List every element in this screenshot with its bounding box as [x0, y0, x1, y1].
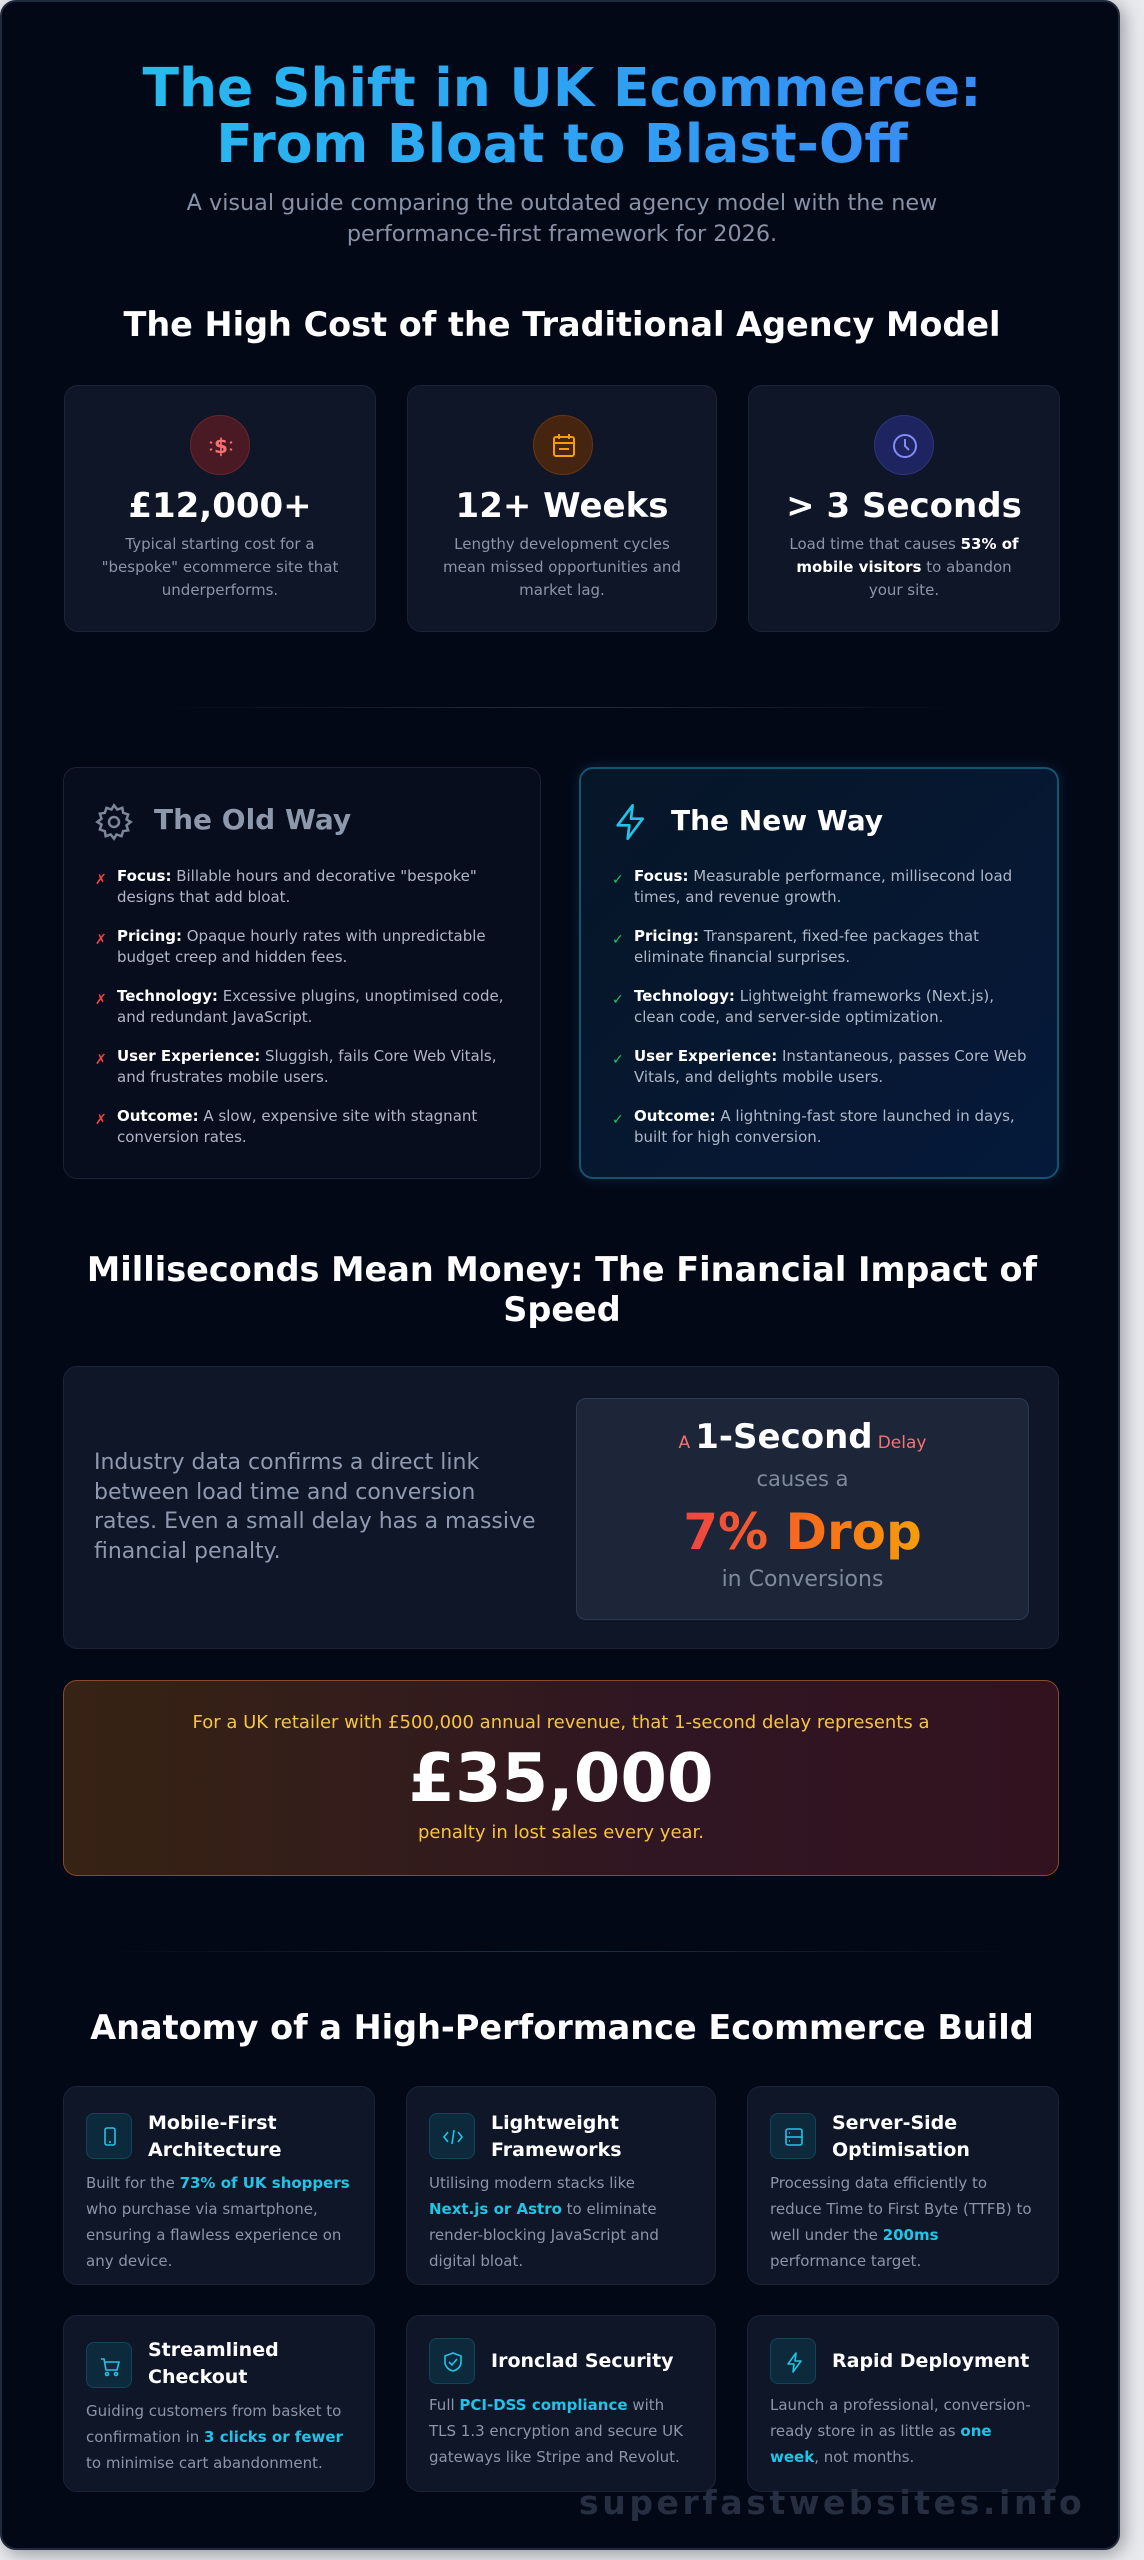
- subtitle: performance-first framework for 2026.: [347, 221, 777, 247]
- panel: old way: ✗: [95, 872, 107, 888]
- feature: mobile-first: Mobile-First: [148, 2112, 277, 2134]
- feature: frameworks: Frameworks: [491, 2139, 622, 2161]
- panel: penalty: [63, 1680, 1059, 1876]
- feature: mobile-first: Architecture: [148, 2139, 281, 2161]
- icon: bolt: [770, 2338, 816, 2384]
- feature: frameworks: Lightweight: [491, 2112, 619, 2134]
- stat card: cost: Typical starting cost for a "bespoke" ecommerce site that underperforms.: [102, 535, 338, 599]
- list: old way: Technology: Excessive plugins, unoptimised code, and redundant JavaScript.: [117, 987, 504, 1026]
- list: old way: Outcome: A slow, expensive site with stagnant conversion rates.: [117, 1107, 477, 1146]
- list: new way: Focus: Measurable performance, millisecond load times, and revenue growth.: [634, 867, 1012, 906]
- feature: checkout: Streamlined: [148, 2339, 279, 2361]
- icon: code: [429, 2113, 475, 2159]
- feature: deployment: Rapid Deployment: [832, 2350, 1029, 2372]
- callout: 7% drop: causes a: [756, 1467, 849, 1491]
- panel: old way: ✗: [95, 992, 107, 1008]
- icon: phone: [86, 2113, 132, 2159]
- icon: calendar: [533, 415, 593, 475]
- list: old way: Focus: Billable hours and decorative "bespoke" designs that add bloat.: [117, 867, 477, 906]
- heading: milliseconds: Milliseconds Mean Money: The Financial Impact of: [87, 1250, 1037, 1289]
- panel: old way: ✗: [95, 1112, 107, 1128]
- heading: high cost: The High Cost of the Traditional Agency Model: [123, 305, 1001, 344]
- panel: penalty: £35,000: [408, 1739, 714, 1817]
- panel: speed impact: [63, 1366, 1059, 1649]
- feature: security: Ironclad Security: [491, 2350, 674, 2372]
- list: new way: [612, 867, 1026, 1146]
- panel: penalty: For a UK retailer with £500,000 annual revenue, that 1-second delay represents a: [192, 1712, 930, 1733]
- panel: new way: ✓: [612, 1052, 624, 1068]
- stat card: weeks: [407, 385, 717, 632]
- stat card: cost: £12,000+: [128, 486, 312, 526]
- text: industry data: financial penalty.: [94, 1538, 281, 1564]
- list: new way: User Experience: Instantaneous, passes Core Web Vitals, and delights mobile users.: [634, 1047, 1026, 1086]
- feature: checkout: Checkout: [148, 2366, 247, 2388]
- icon: dollar: [190, 415, 250, 475]
- list: old way: Pricing: Opaque hourly rates with unpredictable budget creep and hidden fees.: [117, 927, 486, 966]
- feature: frameworks: Utilising modern stacks like Next.js or Astro to eliminate render-blocking JavaScript and digital bloat.: [429, 2174, 659, 2270]
- icon: cart: [86, 2342, 132, 2388]
- heading: anatomy: Anatomy of a High-Performance Ecommerce Build: [90, 2008, 1034, 2047]
- feature: mobile-first: Built for the 73% of UK shoppers who purchase via smartphone, ensuring a flawless experience on any device.: [86, 2174, 350, 2270]
- callout: 7% drop: A 1-Second Delay: [679, 1417, 926, 1457]
- heading: old way: The Old Way: [154, 803, 351, 836]
- feature: checkout: Guiding customers from basket to confirmation in 3 clicks or fewer to minimise cart abandonment.: [86, 2402, 343, 2472]
- subtitle: A visual guide comparing the outdated agency model with the new: [187, 190, 937, 216]
- icon: gear: [95, 803, 133, 841]
- icon: clock: [874, 415, 934, 475]
- text: industry data: rates. Even a small delay has a massive: [94, 1509, 536, 1534]
- list: old way: [95, 867, 504, 1146]
- heading: milliseconds: [87, 1250, 1038, 1329]
- feature: frameworks: [406, 2086, 716, 2285]
- panel: old way: [63, 767, 541, 1179]
- callout: 7% drop: [576, 1398, 1029, 1620]
- stat card: seconds: > 3 Seconds: [786, 486, 1022, 526]
- icon: server: [770, 2113, 816, 2159]
- callout: 7% drop: in Conversions: [722, 1567, 883, 1592]
- title: The Shift in UK Ecommerce:: [142, 56, 982, 119]
- stat card: weeks: Lengthy development cycles mean missed opportunities and market lag.: [443, 535, 681, 599]
- stat card: cost: [64, 385, 376, 632]
- feature: deployment: [747, 2315, 1059, 2492]
- heading: new way: The New Way: [671, 804, 883, 837]
- list: old way: User Experience: Sluggish, fails Core Web Vitals, and frustrates mobile users.: [117, 1047, 497, 1086]
- feature: server-side: [747, 2086, 1059, 2285]
- text: industry data: Industry data confirms a direct link: [94, 1450, 479, 1475]
- panel: new way: ✓: [612, 872, 624, 888]
- watermark: superfastwebsites.info: [579, 2483, 1085, 2522]
- feature: security: Full PCI-DSS compliance with TLS 1.3 encryption and secure UK gateways like Stripe and Revolut.: [429, 2396, 683, 2466]
- stat card: weeks: 12+ Weeks: [456, 486, 668, 526]
- feature: deployment: Launch a professional, conversion-ready store in as little as one week, not months.: [770, 2396, 1031, 2466]
- feature: checkout: [63, 2315, 375, 2492]
- callout: 7% drop: 7% Drop: [683, 1503, 922, 1561]
- feature: server-side: Optimisation: [832, 2139, 970, 2161]
- feature: server-side: Server-Side: [832, 2112, 957, 2134]
- panel: old way: ✗: [95, 1052, 107, 1068]
- list: new way: Technology: Lightweight frameworks (Next.js), clean code, and server-side optimization.: [634, 987, 994, 1026]
- icon: bolt: [616, 804, 644, 840]
- feature: security: [406, 2315, 716, 2492]
- list: new way: Pricing: Transparent, fixed-fee packages that eliminate financial surprises.: [634, 927, 979, 966]
- stat card: seconds: Load time that causes 53% of mobile visitors to abandon your site.: [789, 535, 1019, 599]
- panel: new way: ✓: [612, 992, 624, 1008]
- panel: new way: ✓: [612, 1112, 624, 1128]
- feature: mobile-first: [63, 2086, 375, 2285]
- heading: milliseconds: Speed: [503, 1290, 621, 1329]
- panel: old way: ✗: [95, 932, 107, 948]
- subtitle: [186, 190, 937, 247]
- feature: server-side: Processing data efficiently to reduce Time to First Byte (TTFB) to well under the 200ms performance target.: [770, 2174, 1032, 2270]
- title: From Bloat to Blast-Off: [216, 112, 908, 175]
- stat card: seconds: [748, 385, 1060, 632]
- title: [2, 60, 1122, 172]
- text: industry data: between load time and conversion: [94, 1480, 475, 1504]
- icon: shield: [429, 2338, 475, 2384]
- panel: penalty: penalty in lost sales every year.: [418, 1822, 704, 1843]
- list: new way: Outcome: A lightning-fast store launched in days, built for high conversion.: [634, 1107, 1015, 1146]
- icon: dollar: $: [214, 434, 228, 458]
- text: industry data: [94, 1450, 536, 1564]
- panel: new way: ✓: [612, 932, 624, 948]
- panel: new way: [579, 767, 1059, 1179]
